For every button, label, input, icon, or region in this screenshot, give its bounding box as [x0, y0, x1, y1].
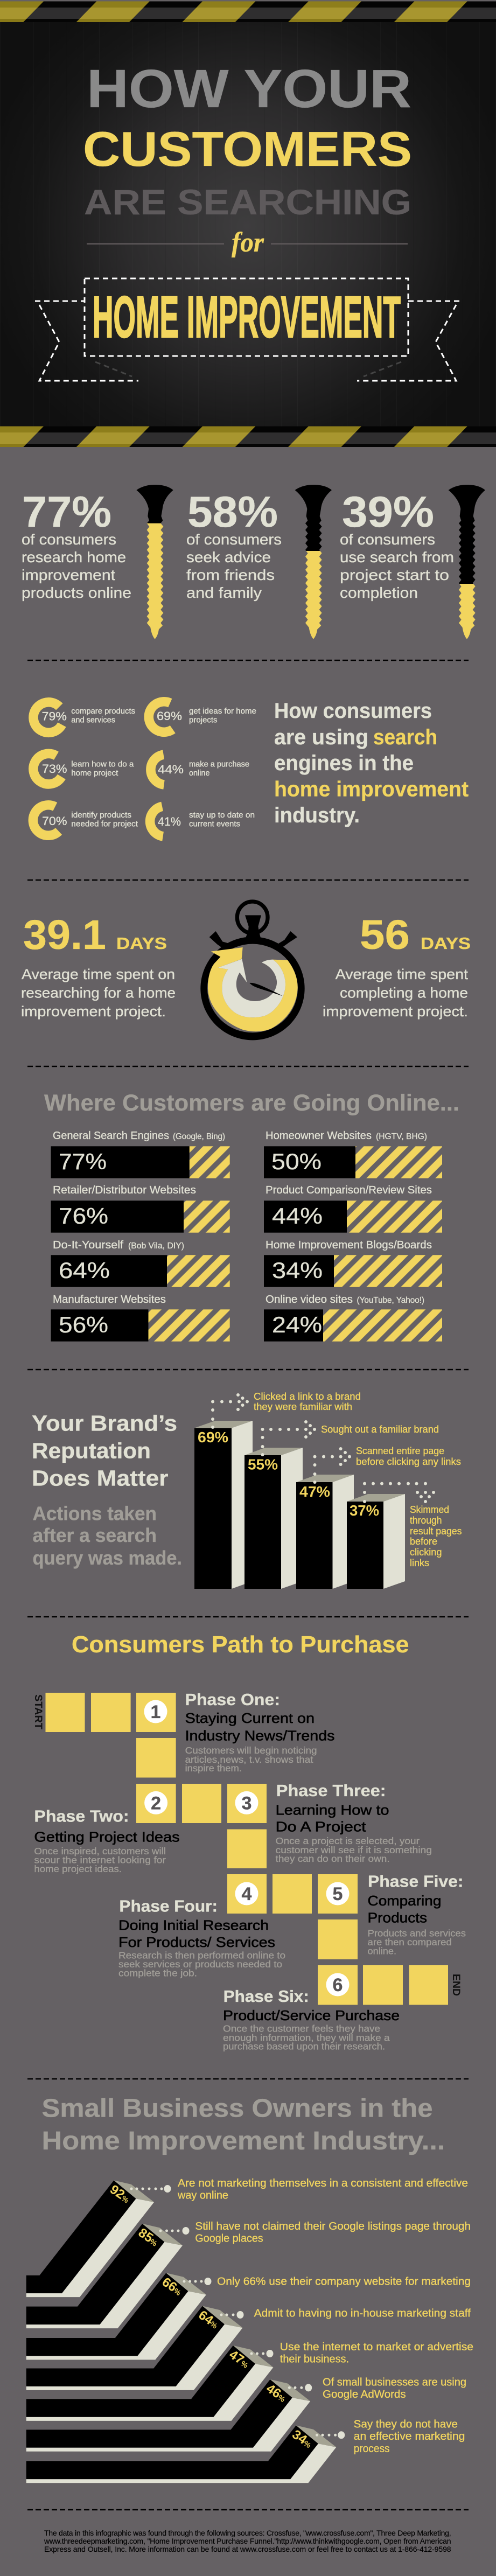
label: scanned	[356, 1446, 461, 1467]
bottom hazard tape	[0, 427, 496, 447]
stat: 58 percent: 58%	[187, 488, 278, 536]
leader dots	[130, 2185, 345, 2439]
stat: 56 days: 56	[360, 912, 410, 958]
ring 41 percent: 41%	[158, 815, 181, 828]
text block: actions taken	[32, 1502, 182, 1569]
ring 44 percent: online	[189, 769, 210, 778]
bar: do it yourself	[51, 1239, 230, 1287]
heading: how consumers are using search: How consumers	[274, 699, 432, 723]
phase one text: articles,news, t.v. shows that	[185, 1754, 313, 1765]
ring 79 percent: and services	[71, 716, 115, 725]
footer sources: www.threedeepmarketing.com, "Home Improvement Purchase Funnel."http://www.thinkwithgoogle.com, Open from American	[44, 2537, 451, 2545]
bar: online video sites	[264, 1294, 442, 1342]
stat: 77 percent: improvement	[22, 567, 115, 583]
ring 44 percent	[151, 755, 249, 785]
phase three text: they can do on their own.	[276, 1853, 390, 1864]
label: 47 percent	[280, 2341, 473, 2365]
phase three text: customer will see if it is something	[276, 1845, 432, 1855]
phase four text: seek services or products needed to	[118, 1959, 282, 1970]
title: customers: CUSTOMERS	[83, 122, 412, 177]
bar 55 percent: 55%	[248, 1456, 278, 1473]
heading: small business owners: Small Business Owners in the	[42, 2095, 433, 2123]
bar chart: online destinations	[51, 1130, 442, 1342]
rotated percent labels: 64%	[196, 2308, 222, 2331]
phase three text: Do A Project	[276, 1818, 367, 1834]
phase six text: Product/Service Purchase	[223, 2007, 400, 2023]
stat: 39.1 days: DAYS	[116, 934, 167, 953]
label: clicked a link: Clicked a link to a brand	[254, 1391, 361, 1402]
bar 47 percent: 47%	[299, 1483, 330, 1500]
label: skimmed	[410, 1504, 462, 1568]
phase four text: Doing Initial Research	[118, 1917, 269, 1933]
icon: screw 58 percent	[295, 485, 332, 639]
stat: 77 percent	[22, 488, 131, 601]
label: 34 percent: an effective marketing	[354, 2431, 465, 2442]
bar: general search engines	[51, 1130, 230, 1178]
rotated percent labels: 47%	[227, 2347, 253, 2371]
stat: 56 days: Average time spent	[336, 966, 469, 982]
label: skimmed: Skimmed	[410, 1504, 449, 1515]
phase five text: Comparing	[367, 1893, 441, 1909]
label: 46 percent	[323, 2376, 466, 2400]
label: clicked a link: they were familiar with	[254, 1401, 352, 1412]
path squares	[45, 1693, 448, 2005]
ring 69 percent: get ideas for home	[189, 707, 256, 716]
top hazard tape	[0, 1, 496, 22]
title: how your: HOW YOUR	[87, 59, 411, 119]
number badges: 1	[151, 1702, 160, 1722]
ring 44 percent: 44%	[158, 763, 184, 776]
bar: online video sites: 24%	[272, 1312, 322, 1337]
stat: 39 percent: of consumers	[340, 531, 435, 548]
phase three text: Once a project is selected, your	[276, 1835, 420, 1846]
stat: 39 percent: 39%	[342, 488, 434, 536]
label: 46 percent: Of small businesses are using	[323, 2376, 466, 2388]
number badges: 5	[333, 1884, 343, 1904]
number badges: 3	[242, 1793, 252, 1813]
dotted arrow: scanned	[313, 1447, 351, 1484]
heading: your brands reputation does matter: Does Matter	[32, 1466, 169, 1491]
stat: 56 days: DAYS	[421, 934, 471, 953]
bar: retailer distributor websites: 76%	[59, 1203, 108, 1228]
stat: 39 percent: use search from	[340, 549, 454, 566]
heading: where customers are going online: Where Customers are Going Online...	[44, 1090, 459, 1116]
label: 66 percent: Only 66% use their company website for marketing	[217, 2276, 471, 2288]
phase one text: inspire them.	[185, 1763, 242, 1774]
label: sought out: Sought out a familiar brand	[321, 1424, 439, 1435]
phase two text: home project ideas.	[34, 1863, 122, 1874]
panel: search uses rings	[33, 702, 256, 836]
bar: general search engines: 77%	[59, 1149, 107, 1174]
number badges: 2	[151, 1793, 161, 1813]
bar: online video sites: Online video sites	[266, 1294, 353, 1306]
rotated percent labels: 66%	[159, 2274, 185, 2299]
phase two text	[34, 1807, 180, 1874]
phase three text: Phase Three:	[276, 1781, 386, 1800]
ring 41 percent	[150, 806, 255, 836]
label: skimmed: through	[410, 1515, 442, 1526]
bar: manufacturer websites: 56%	[59, 1312, 108, 1337]
ring 69 percent: projects	[189, 716, 218, 725]
phase five text: online.	[367, 1946, 396, 1957]
stat: 58 percent: from friends	[186, 567, 275, 583]
ring 41 percent: stay up to date on	[189, 811, 255, 820]
3d bar chart: actions after search	[194, 1391, 462, 1589]
label: scanned: before clicking any links	[356, 1456, 461, 1467]
label: 92 percent: Are not marketing themselves in a consistent and effective	[178, 2177, 468, 2189]
rotated percent labels	[107, 2182, 315, 2451]
stat: 39.1 days: improvement project.	[21, 1003, 166, 1020]
ring 79 percent: compare products	[71, 707, 135, 716]
stat: 56 days: completing a home	[340, 985, 468, 1001]
hero panel	[0, 1, 496, 447]
label: 47 percent: Use the internet to market or advertise	[280, 2341, 473, 2353]
footer sources: The data in this infographic was found through the following sources: Crossfuse, "www.crossfuse.com", Three Deep Marketing,	[44, 2529, 451, 2537]
bar 37 percent	[347, 1494, 405, 1589]
bar: manufacturer websites	[51, 1294, 230, 1342]
bar: manufacturer websites: Manufacturer Websites	[53, 1294, 166, 1306]
phase five text: Products	[367, 1909, 427, 1925]
phase four text: For Products/ Services	[118, 1934, 275, 1950]
heading: your brands reputation does matter: Reputation	[32, 1439, 151, 1463]
label: skimmed: result pages	[410, 1526, 462, 1537]
heading: how consumers are using search	[274, 699, 469, 827]
bar 69 percent: 69%	[198, 1429, 228, 1446]
stat: 39.1 days: researching for a home	[21, 985, 176, 1001]
rotated percent labels: 85%	[136, 2225, 162, 2250]
bar 47 percent	[296, 1475, 354, 1589]
bar 69 percent	[194, 1421, 253, 1589]
bar: home improvement blogs boards: Home Improvement Blogs/Boards	[266, 1239, 432, 1251]
dashed ribbon banner	[35, 278, 460, 381]
ring 69 percent: 69%	[157, 709, 182, 723]
stair chart: small business stats	[26, 2177, 473, 2483]
stat: 39 percent	[340, 488, 454, 601]
phase three text	[276, 1781, 432, 1864]
phase one text: Phase One:	[185, 1690, 280, 1709]
ring 70 percent: needed for project	[71, 820, 138, 829]
bar: online video sites: (YouTube, Yahoo!)	[357, 1296, 424, 1305]
heading: your brands reputation does matter: Your Brand’s	[32, 1411, 177, 1436]
phase two text: Once inspired, customers will	[34, 1846, 166, 1856]
stair shapes	[26, 2180, 336, 2483]
stat: 58 percent: and family	[186, 584, 262, 601]
stat: 77 percent: 77%	[22, 488, 111, 536]
phase one text: Customers will begin noticing	[185, 1745, 317, 1756]
ring 70 percent: 70%	[42, 814, 67, 828]
phase two text: scour the internet looking for	[34, 1855, 166, 1866]
label: clicked a link	[254, 1391, 361, 1412]
bar: homeowner websites: (HGTV, BHG)	[376, 1132, 427, 1141]
phase six text: Once the customer feels they have	[223, 2023, 380, 2034]
label: skimmed: before	[410, 1536, 437, 1547]
label: 85 percent: Google places	[195, 2232, 263, 2244]
phase four text	[118, 1897, 285, 1978]
stat: 39 percent: project start to	[340, 567, 449, 583]
heading: how consumers are using search: search	[373, 725, 437, 749]
bar: home improvement blogs boards: 34%	[272, 1258, 323, 1283]
label: 34 percent: process	[354, 2443, 390, 2455]
stat: 39.1 days	[21, 912, 176, 1020]
phase five text: Products and services	[367, 1928, 466, 1938]
phase six text	[223, 1987, 400, 2052]
heading: consumers path to purchase: Consumers Path to Purchase	[72, 1631, 409, 1658]
phase five text: are then compared	[367, 1937, 452, 1947]
dotted arrow: sought out	[261, 1420, 316, 1456]
label: 47 percent: their business.	[280, 2354, 349, 2365]
stat: 58 percent: of consumers	[186, 531, 282, 548]
number badges: 4	[242, 1884, 252, 1904]
phase four text: Phase Four:	[119, 1897, 218, 1915]
stat: 77 percent: products online	[22, 584, 131, 601]
label: scanned: Scanned entire page	[356, 1446, 444, 1456]
label: 46 percent: Google AdWords	[323, 2389, 406, 2400]
bar: home improvement blogs boards	[264, 1239, 442, 1287]
stat: 77 percent: of consumers	[22, 531, 116, 548]
ring 79 percent: 79%	[42, 709, 67, 723]
ring 73 percent: learn how to do a	[71, 759, 134, 769]
heading: how consumers are using search: home improvement	[274, 778, 469, 801]
label: 64 percent: Admit to having no in-house marketing staff	[254, 2308, 471, 2320]
icon: stopwatch	[200, 902, 305, 1040]
title divider with for: for	[232, 227, 264, 258]
bar 55 percent	[244, 1448, 303, 1589]
heading: how consumers are using search: engines in the	[274, 751, 414, 775]
bar: product comparison review sites: Product Comparison/Review Sites	[266, 1184, 432, 1196]
stat: 39.1 days: Average time spent on	[22, 966, 175, 982]
phase two text: Getting Project Ideas	[34, 1828, 180, 1845]
label: 85 percent: Still have not claimed their Google listings page through	[195, 2221, 471, 2232]
phase five text: Phase Five:	[368, 1872, 463, 1891]
stat: 39 percent: completion	[340, 584, 418, 601]
footer sources: Express and Outsell, Inc. More information can be found at www.crossfuse.com or feel free to contact us at 1-866-412-9598	[44, 2545, 451, 2553]
footer sources	[44, 2529, 451, 2553]
bar: retailer distributor websites: Retailer/Distributor Websites	[53, 1184, 196, 1196]
ring 44 percent: make a purchase	[189, 759, 249, 769]
icon: screw 39 percent	[449, 485, 485, 639]
label: 85 percent	[195, 2221, 471, 2244]
phase three text: Learning How to	[276, 1802, 389, 1818]
phase one text: Staying Current on	[185, 1710, 315, 1726]
phase four text: complete the job.	[118, 1967, 197, 1978]
number badges	[144, 1700, 349, 1996]
dotted arrow: clicked a link	[211, 1393, 249, 1429]
stat: 58 percent	[186, 488, 282, 601]
phase four text: Research is then performed online to	[118, 1950, 285, 1961]
bar: general search engines: (Google, Bing)	[173, 1132, 225, 1141]
ring 41 percent: current events	[189, 820, 240, 829]
bar 37 percent: 37%	[350, 1502, 379, 1519]
ring 70 percent: identify products	[71, 811, 131, 820]
bar: do it yourself: (Bob Vila, DIY)	[128, 1241, 184, 1251]
ring 73 percent: home project	[71, 769, 118, 778]
heading: small business owners	[42, 2095, 445, 2155]
label: skimmed: links	[410, 1558, 429, 1568]
end label: END	[450, 1974, 462, 1996]
ring 79 percent	[33, 702, 135, 732]
phase one text	[185, 1690, 335, 1774]
label: 92 percent: way online	[177, 2189, 228, 2201]
bar: homeowner websites: 50%	[271, 1149, 322, 1174]
bar: product comparison review sites: 44%	[272, 1203, 323, 1228]
phase one text: Industry News/Trends	[185, 1728, 335, 1744]
stat: 77 percent: research home	[22, 549, 126, 566]
heading: small business owners: Home Improvement Industry...	[42, 2127, 445, 2155]
label: 92 percent	[177, 2177, 468, 2201]
stat: 39.1 days: 39.1	[23, 912, 106, 958]
rotated percent labels: 34%	[289, 2427, 315, 2451]
phase two text: Phase Two:	[34, 1807, 129, 1826]
path diagram	[32, 1690, 466, 2052]
phase six text: purchase based upon their research.	[223, 2041, 385, 2052]
heading: how consumers are using search: are using	[274, 725, 368, 749]
title: are searching: ARE SEARCHING	[84, 182, 411, 222]
number badges: 6	[333, 1975, 343, 1995]
stat: 56 days	[323, 912, 471, 1020]
heading: your brands reputation does matter	[32, 1411, 177, 1491]
rotated percent labels: 46%	[263, 2381, 289, 2405]
text block: actions taken: query was made.	[32, 1547, 182, 1569]
bar: do it yourself: 64%	[59, 1258, 110, 1283]
heading: how consumers are using search: industry.	[274, 804, 360, 827]
bar: retailer distributor websites	[51, 1184, 230, 1233]
label: 34 percent: Say they do not have	[354, 2418, 458, 2430]
label: skimmed: clicking	[410, 1547, 442, 1558]
start label: START	[32, 1694, 44, 1729]
bar: homeowner websites: Homeowner Websites	[266, 1130, 372, 1142]
ring 73 percent	[33, 753, 134, 784]
rotated percent labels: 92%	[107, 2182, 133, 2206]
ring 73 percent: 73%	[42, 762, 67, 776]
icon: screw 77 percent	[136, 485, 173, 639]
bar: product comparison review sites	[264, 1184, 442, 1233]
stat: 56 days: improvement project.	[323, 1003, 468, 1020]
bar: homeowner websites	[264, 1130, 442, 1178]
ring 69 percent	[149, 702, 256, 732]
label: 34 percent	[354, 2418, 465, 2455]
phase six text: Phase Six:	[223, 1987, 309, 2006]
stat: 58 percent: seek advice	[186, 549, 271, 566]
phase five text	[367, 1872, 466, 1957]
phase six text: enough information, they will make a	[223, 2032, 390, 2043]
bar: general search engines: General Search Engines	[53, 1130, 169, 1142]
ring 70 percent	[33, 805, 138, 835]
text block: actions taken: Actions taken	[32, 1502, 157, 1524]
text block: actions taken: after a search	[32, 1524, 157, 1546]
dotted arrow: skimmed	[363, 1482, 435, 1503]
bar: do it yourself: Do-It-Yourself	[53, 1239, 123, 1251]
